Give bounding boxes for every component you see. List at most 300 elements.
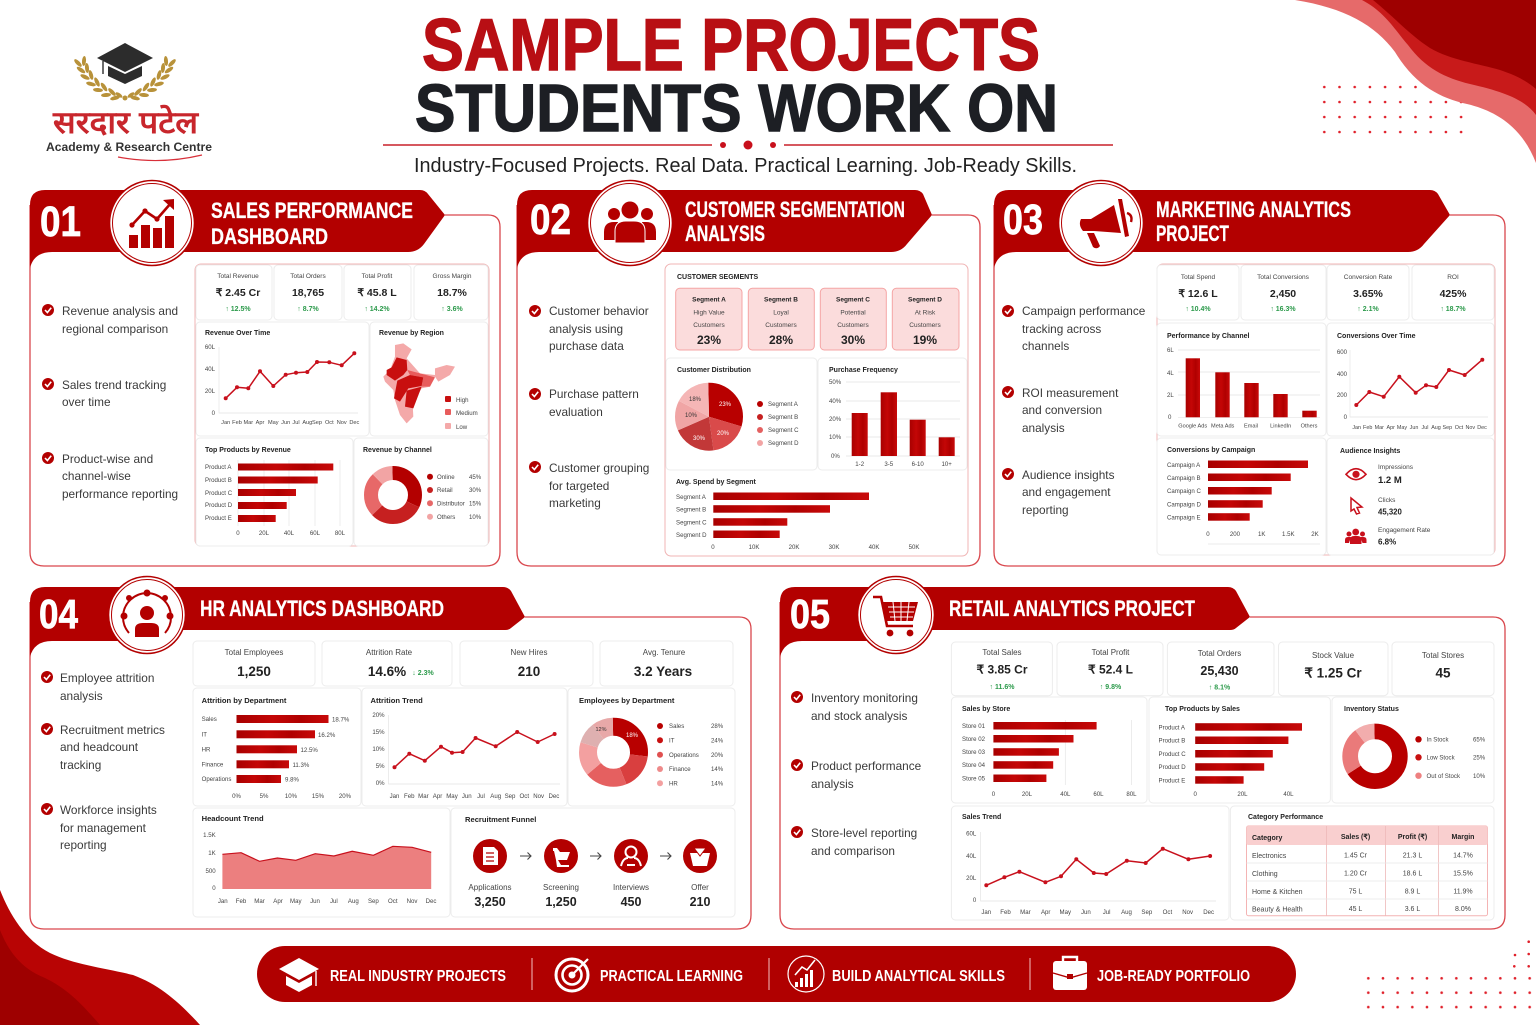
KPI cards 04: 14.6% (368, 664, 406, 679)
icon: customer group (604, 202, 656, 243)
KPI cards: Total Profit (362, 273, 393, 280)
donut chart: revenue by channel: Revenue by Channel (363, 447, 432, 454)
line chart: conversions over time: Aug (1431, 425, 1441, 431)
line chart: conversions over time: Conversions Over Time (1337, 333, 1416, 340)
bullet list 05 (791, 691, 922, 858)
KPI cards: 3.65% (1353, 288, 1384, 300)
KPI cards 04: New Hires (511, 648, 547, 657)
line chart: conversions over time: Feb (1363, 425, 1372, 431)
bar chart: attrition by department: Attrition by Department (202, 696, 287, 705)
table: category performance: 18.6 L (1403, 870, 1422, 878)
bullet list 03: channels (1022, 339, 1069, 353)
line chart: sales trend: Jan (981, 909, 991, 916)
donut chart: revenue by channel: Online (437, 474, 455, 481)
bar chart: top products by revenue: Product C (205, 490, 233, 497)
bar chart: performance by channel: Google Ads (1178, 424, 1207, 430)
bullet list 02: marketing (549, 496, 601, 510)
donut chart: employees by department: 12% (595, 727, 607, 733)
bar chart: average spend by segment (676, 479, 919, 551)
pie chart: customer distribution: Segment B (768, 414, 798, 421)
funnel step: applications: 3,250 (474, 895, 506, 909)
pie chart: customer distribution: 23% (719, 402, 732, 408)
line chart: sales trend: Sales Trend (962, 814, 1001, 821)
donut chart: revenue by channel: Distributor (437, 500, 465, 508)
bullet list 01: Sales trend tracking (62, 378, 166, 392)
area chart: headcount trend: Oct (388, 898, 398, 905)
line chart: sales trend: Aug (1121, 909, 1132, 916)
funnel step: offer (683, 839, 717, 909)
bullet list 04: Workforce insights (60, 803, 157, 817)
line chart: conversions over time (1327, 323, 1494, 436)
customer segments cards: Loyal (773, 310, 789, 316)
bar chart: purchase frequency: Purchase Frequency (829, 367, 898, 374)
bar chart: purchase frequency: 20% (829, 416, 842, 423)
area chart: headcount trend (193, 808, 450, 917)
audience insights: Impressions (1378, 464, 1414, 471)
bar chart: conversions by campaign: Campaign E (1167, 514, 1201, 522)
KPI cards 05: ↑ 9.8% (1100, 684, 1122, 691)
bar chart: top products by sales: Product B (1158, 738, 1185, 744)
table: category performance: Margin (1452, 834, 1474, 841)
line chart: conversions over time: Dec (1477, 425, 1487, 431)
bullet list 05: analysis (811, 777, 854, 791)
line chart: attrition trend: 20% (372, 712, 385, 719)
pie chart: customer distribution: Segment A (768, 401, 799, 408)
bar chart: top products by revenue: 80L (335, 530, 346, 537)
area chart: headcount trend: Sep (368, 898, 379, 905)
table: category performance: 8.9 L (1405, 888, 1420, 896)
donut chart: employees by department: 14% (711, 780, 724, 788)
bullet list 05: Inventory monitoring (811, 691, 918, 705)
bullet list 03: ROI measurement (1022, 386, 1119, 400)
arrow (660, 852, 671, 860)
line chart: attrition trend: Feb (404, 793, 415, 800)
recruitment funnel (451, 808, 735, 917)
bullet list 04: reporting (60, 838, 107, 852)
donut chart: inventory status: 65% (1473, 736, 1486, 744)
area chart: headcount trend: Feb (236, 898, 247, 905)
line chart: revenue over time: 60L (205, 344, 216, 351)
bar chart: performance by channel: 2L (1167, 392, 1174, 399)
bullet list 03: Audience insights (1022, 468, 1115, 482)
audience insights: 1.2 M (1378, 475, 1402, 486)
donut chart: employees by department: Employees by Department (579, 696, 675, 705)
donut chart: inventory status: Inventory Status (1344, 706, 1399, 713)
arrow (590, 852, 601, 860)
decoration: top right corner waves (1295, 0, 1536, 163)
KPI cards 04: 3.2 Years (634, 664, 692, 679)
donut chart: inventory status: In Stock (1426, 736, 1449, 744)
bar chart: purchase frequency: 50% (829, 379, 842, 386)
bar chart: conversions by campaign: Campaign B (1167, 475, 1201, 482)
audience insights: 6.8% (1378, 538, 1396, 546)
bullet list 05: and comparison (811, 844, 895, 858)
customer segments cards: Segment B (764, 296, 798, 304)
footer item: practical learning: PRACTICAL LEARNING (600, 968, 743, 985)
bar chart: top products by revenue: 40L (284, 530, 295, 537)
bullet list 02: Customer behavior (549, 304, 649, 318)
panel header 03: 03 (1003, 196, 1043, 244)
bullet list 02 (529, 304, 649, 510)
KPI cards: 18.7% (437, 287, 468, 299)
line chart: revenue over time: May (268, 420, 279, 426)
KPI cards 05: ↑ 11.6% (990, 684, 1015, 691)
KPI cards 05: ₹ 52.4 L (1088, 662, 1133, 676)
bar chart: performance by channel: Meta Ads (1211, 424, 1235, 430)
KPI cards: Total Spend (1181, 274, 1216, 281)
bar chart: sales by store: 0 (992, 791, 996, 798)
logo (46, 43, 212, 161)
title divider (383, 140, 1113, 150)
funnel step: offer: 210 (690, 895, 710, 909)
footer banner (257, 946, 1296, 1002)
line chart: attrition trend: 15% (372, 729, 385, 736)
bar chart: purchase frequency (818, 358, 967, 470)
icon: eye (1346, 469, 1366, 480)
table: category performance: Category Performance (1248, 814, 1323, 821)
bar chart: attrition by department: 5% (260, 793, 269, 800)
panel: 04 HR analytics dashboard (30, 576, 751, 929)
KPI cards: ↑ 14.2% (364, 306, 390, 313)
line chart: sales trend: Feb (1000, 909, 1011, 916)
bar chart: attrition by department: 9.8% (285, 776, 299, 784)
bar chart: average spend by segment: 10K (749, 544, 759, 551)
title: STUDENTS WORK ON (415, 71, 1058, 146)
bar chart: top products by sales: Product C (1158, 751, 1186, 758)
line chart: sales trend: Jul (1103, 909, 1110, 916)
customer segments cards: High Value (693, 310, 725, 316)
customer segments cards: Customers (765, 322, 797, 329)
area chart: headcount trend: Mar (254, 898, 265, 905)
line chart: conversions over time: 400 (1337, 371, 1348, 378)
bar chart: average spend by segment: 50K (909, 544, 919, 551)
table: category performance: 21.3 L (1403, 852, 1422, 860)
donut chart: employees by department: 20% (711, 752, 724, 759)
area chart: headcount trend: Headcount Trend (202, 814, 264, 823)
KPI cards 05: Total Sales (982, 648, 1022, 657)
subtitle: Industry-Focused Projects. Real Data. Practical Learning. Job-Ready Skills. (414, 155, 1077, 177)
bar chart: purchase frequency: 6-10 (912, 461, 924, 468)
table: category performance: Sales (₹) (1341, 833, 1370, 841)
panel header 03: MARKETING ANALYTICS (1156, 197, 1351, 222)
bar chart: top products by revenue: 0 (236, 530, 240, 537)
customer segments cards: Customers (837, 322, 869, 329)
line chart: sales trend: 0 (973, 897, 977, 904)
bullet list 01: Product-wise and (62, 452, 153, 466)
bar chart: conversions by campaign: 2K (1311, 531, 1319, 538)
bar chart: purchase frequency: 3-5 (884, 461, 894, 468)
customer segments cards: Segment A (692, 296, 726, 304)
line chart: attrition trend: Attrition Trend (370, 696, 423, 705)
KPI cards: ₹ 45.8 L (357, 287, 397, 299)
bullet list 02: for targeted (549, 479, 609, 493)
bar chart: attrition by department: Operations (202, 776, 231, 783)
line chart: attrition trend: 5% (376, 763, 385, 770)
KPI cards: 2,450 (1270, 288, 1296, 300)
line chart: conversions over time: Jun (1410, 425, 1418, 431)
donut chart: revenue by channel: Retail (437, 487, 453, 494)
area chart: headcount trend: Jun (310, 898, 320, 905)
bullet list 02: purchase data (549, 339, 624, 353)
donut chart: inventory status: 25% (1473, 754, 1486, 762)
donut chart: revenue by channel (354, 438, 488, 546)
bullet list 03: reporting (1022, 503, 1069, 517)
pie chart: customer distribution: 30% (693, 436, 706, 442)
KPI cards 04: Total Employees (225, 648, 283, 657)
line chart: attrition trend: Nov (533, 793, 545, 800)
area chart: headcount trend: Nov (407, 898, 418, 905)
donut chart: employees by department (568, 688, 735, 806)
bar chart: top products by sales: Top Products by Sales (1165, 706, 1240, 713)
line chart: revenue over time: Nov (337, 420, 347, 426)
line chart: conversions over time: Jul (1422, 425, 1428, 431)
funnel step: screening (543, 839, 579, 909)
map: revenue by region: Medium (456, 410, 478, 417)
bar chart: conversions by campaign: 1K (1258, 531, 1265, 538)
footer item: real industry projects: REAL INDUSTRY PROJECTS (330, 968, 506, 985)
bar chart: purchase frequency: 1-2 (855, 461, 865, 468)
audience insights (1327, 438, 1494, 555)
KPI cards: ↑ 18.7% (1440, 306, 1466, 313)
line chart: conversions over time: Nov (1466, 425, 1475, 431)
table: category performance: 8.0% (1455, 906, 1471, 913)
bullet list 05: Product performance (811, 759, 922, 773)
KPI cards: ROI (1447, 274, 1459, 281)
donut chart: employees by department: Sales (669, 723, 684, 730)
line chart: revenue over time: Feb (232, 420, 242, 426)
bar chart: attrition by department (193, 688, 361, 806)
pie chart: customer distribution: 18% (689, 397, 702, 403)
line chart: attrition trend: May (446, 793, 459, 800)
donut chart: revenue by channel: 15% (469, 500, 482, 508)
dashboard 03 (1157, 264, 1495, 555)
area chart: headcount trend: 500 (206, 868, 216, 875)
panel header 04: HR ANALYTICS DASHBOARD (200, 596, 444, 621)
line chart: revenue over time: Aug (302, 420, 312, 426)
line chart: attrition trend: Oct (520, 793, 529, 800)
panel: 02 customer segmentation analysis (517, 180, 980, 566)
arrow (520, 852, 531, 860)
footer item: build analytical skills: BUILD ANALYTICAL SKILLS (832, 968, 1005, 985)
panel: 01 sales performance dashboard (30, 180, 500, 566)
dashboard 02 (665, 264, 968, 556)
panel: 03 marketing analytics project (994, 180, 1505, 566)
KPI cards 04: Avg. Tenure (643, 648, 686, 657)
bar chart: average spend by segment: 0 (711, 544, 715, 551)
bar chart: attrition by department: HR (202, 746, 211, 754)
line chart: sales trend: May (1060, 909, 1072, 916)
icon: shopping cart (873, 597, 918, 636)
bar chart: top products by sales: 20L (1237, 791, 1248, 798)
bar chart: sales by store (951, 697, 1147, 803)
KPI cards 05: Total Orders (1198, 649, 1241, 658)
KPI cards 05 (951, 642, 1494, 696)
line chart: attrition trend: Jul (477, 793, 485, 800)
line chart: sales trend (951, 806, 1229, 920)
footer item: practical learning (556, 959, 743, 991)
bar chart: conversions by campaign (1157, 438, 1326, 555)
donut chart: employees by department: IT (669, 738, 675, 744)
bar chart: purchase frequency: 10+ (942, 461, 952, 468)
bar chart: average spend by segment: 20K (789, 544, 799, 551)
donut chart: revenue by channel: Others (437, 514, 455, 521)
KPI cards: ₹ 2.45 Cr (216, 287, 260, 299)
line chart: conversions over time: 0 (1344, 414, 1348, 421)
panel header 03: PROJECT (1156, 221, 1229, 246)
bar chart: top products by revenue: Product B (205, 477, 232, 484)
customer segments cards: Customers (693, 322, 725, 329)
area chart: headcount trend: 1.5K (203, 832, 216, 839)
table: category performance: 75 L (1349, 888, 1362, 896)
bullet list 05: Store-level reporting (811, 826, 917, 840)
bar chart: top products by sales: 0 (1194, 791, 1198, 798)
bar chart: top products by sales (1149, 697, 1330, 803)
bullet list 04: tracking (60, 758, 101, 772)
customer segments cards: At Risk (915, 310, 936, 316)
dashboard 01 (195, 264, 489, 546)
icon: cursor (1351, 498, 1362, 514)
donut chart: employees by department: 18% (626, 733, 639, 739)
bar chart: purchase frequency: 40% (829, 398, 842, 405)
bullet list 02: Customer grouping (549, 461, 649, 475)
panel header 02: CUSTOMER SEGMENTATION (685, 197, 905, 222)
line chart: revenue over time: Dec (349, 420, 359, 426)
icon: rising bar chart (129, 199, 174, 248)
bar chart: attrition by department: 18.7% (332, 716, 350, 724)
donut chart: inventory status: Out of Stock (1426, 773, 1461, 780)
line chart: conversions over time: Mar (1375, 425, 1384, 431)
funnel step: offer: Offer (691, 883, 709, 892)
bullet list 05: and stock analysis (811, 709, 907, 723)
line chart: attrition trend: Aug (490, 793, 501, 800)
line chart: revenue over time: Revenue Over Time (205, 330, 270, 337)
KPI cards 05: Total Stores (1422, 651, 1464, 660)
line chart: sales trend: Mar (1020, 909, 1031, 916)
KPI cards: ↑ 3.6% (441, 306, 463, 313)
line chart: attrition trend: Apr (433, 793, 442, 800)
KPI cards 04: ↓ 2.3% (412, 670, 434, 677)
bar chart: top products by revenue: 20L (259, 530, 270, 537)
KPI cards: ↑ 2.1% (1357, 306, 1379, 313)
line chart: conversions over time: Sep (1443, 425, 1452, 431)
line chart: revenue over time (196, 322, 369, 436)
table: category performance: 1.45 Cr (1344, 852, 1368, 860)
footer item: job-ready portfolio: JOB-READY PORTFOLIO (1097, 968, 1250, 985)
area chart: headcount trend: May (290, 898, 303, 905)
icon: megaphone (1080, 199, 1132, 248)
KPI cards 04: Attrition Rate (366, 648, 413, 657)
bar chart: top products by sales: Product D (1158, 764, 1186, 771)
audience insights: 45,320 (1378, 508, 1403, 516)
bullet list 03: and engagement (1022, 485, 1111, 499)
panel header 02: ANALYSIS (685, 221, 765, 246)
KPI cards 05: Total Profit (1092, 648, 1130, 657)
bar chart: attrition by department: Sales (202, 716, 217, 723)
KPI cards (196, 265, 488, 320)
donut chart: revenue by channel: 45% (469, 474, 482, 481)
bar chart: conversions by campaign: Campaign A (1167, 462, 1201, 469)
funnel step: applications: Applications (468, 883, 512, 892)
footer item: job-ready portfolio (1053, 957, 1250, 990)
line chart: conversions over time: May (1397, 425, 1407, 431)
customer segments cards: 19% (913, 333, 937, 347)
line chart: attrition trend: Jun (462, 793, 472, 800)
panel: 05 retail analytics project (780, 576, 1505, 929)
line chart: conversions over time: Oct (1455, 425, 1464, 431)
line chart: revenue over time: 20L (205, 388, 216, 395)
bar chart: average spend by segment: Segment D (676, 532, 707, 539)
bar chart: conversions by campaign: 200 (1230, 531, 1241, 538)
donut chart: employees by department: 14% (711, 766, 724, 773)
pie chart: customer distribution (666, 358, 817, 470)
KPI cards 05: Stock Value (1312, 651, 1355, 660)
pie chart: customer distribution: Segment D (768, 440, 799, 447)
line chart: revenue over time: Oct (325, 420, 334, 426)
pie chart: customer distribution: 10% (685, 413, 698, 419)
panel header 02: 02 (530, 196, 571, 244)
pie chart: customer distribution: Customer Distribution (677, 367, 751, 374)
KPI cards 05: 25,430 (1200, 664, 1239, 678)
donut chart: employees by department: HR (669, 780, 678, 788)
KPI cards: 18,765 (292, 287, 324, 299)
bar chart: top products by revenue (196, 438, 353, 546)
bar chart: purchase frequency: 10% (829, 434, 842, 441)
KPI cards: ↑ 10.4% (1185, 306, 1211, 313)
bar chart: conversions by campaign: 1.5K (1282, 531, 1295, 538)
table: category performance: 14.7% (1453, 852, 1473, 860)
audience insights: Engagement Rate (1378, 527, 1431, 534)
bullet list 04: Recruitment metrics (60, 723, 165, 737)
icon: HR network person (120, 590, 174, 637)
bar chart: conversions by campaign: Conversions by Campaign (1167, 447, 1255, 454)
table: category performance: 1.20 Cr (1344, 870, 1368, 878)
funnel step: interviews: Interviews (613, 883, 649, 892)
line chart: conversions over time: Jan (1352, 425, 1361, 431)
bar chart: top products by revenue: Product D (205, 502, 233, 509)
bar chart: sales by store: Store 02 (962, 736, 986, 743)
bar chart: performance by channel: Email (1244, 424, 1258, 430)
KPI cards: ↑ 8.7% (297, 306, 319, 313)
line chart: attrition trend: Jan (390, 793, 399, 800)
pie chart: customer distribution: Segment C (768, 427, 799, 434)
panel header 02 (517, 180, 932, 268)
line chart: sales trend: Oct (1163, 909, 1172, 916)
bullet list 03: and conversion (1022, 403, 1102, 417)
line chart: sales trend: Sep (1141, 909, 1153, 916)
bar chart: attrition by department: Finance (202, 762, 224, 768)
KPI cards: Total Revenue (217, 273, 259, 280)
line chart: sales trend: Dec (1203, 909, 1214, 916)
KPI cards (1157, 265, 1494, 320)
decoration: bottom right dots (1361, 940, 1536, 1014)
donut chart: employees by department: 28% (711, 723, 724, 730)
customer segments cards: CUSTOMER SEGMENTS (677, 274, 758, 281)
customer segments cards: Segment D (908, 296, 942, 304)
icon: audience group (1345, 529, 1366, 544)
area chart: headcount trend: Dec (426, 898, 436, 905)
bullet list 02: evaluation (549, 405, 603, 419)
bar chart: conversions by campaign: 0 (1206, 531, 1210, 538)
line chart: attrition trend: 0% (376, 780, 385, 787)
bar chart: average spend by segment: 40K (869, 544, 879, 551)
KPI cards: ↑ 16.3% (1270, 306, 1296, 313)
funnel step: interviews (613, 839, 649, 909)
KPI cards 05: 45 (1435, 666, 1451, 680)
funnel step: applications (468, 839, 512, 909)
table: category performance (1230, 806, 1494, 920)
table: category performance: 3.6 L (1405, 906, 1420, 913)
area chart: headcount trend: 0 (212, 885, 216, 892)
